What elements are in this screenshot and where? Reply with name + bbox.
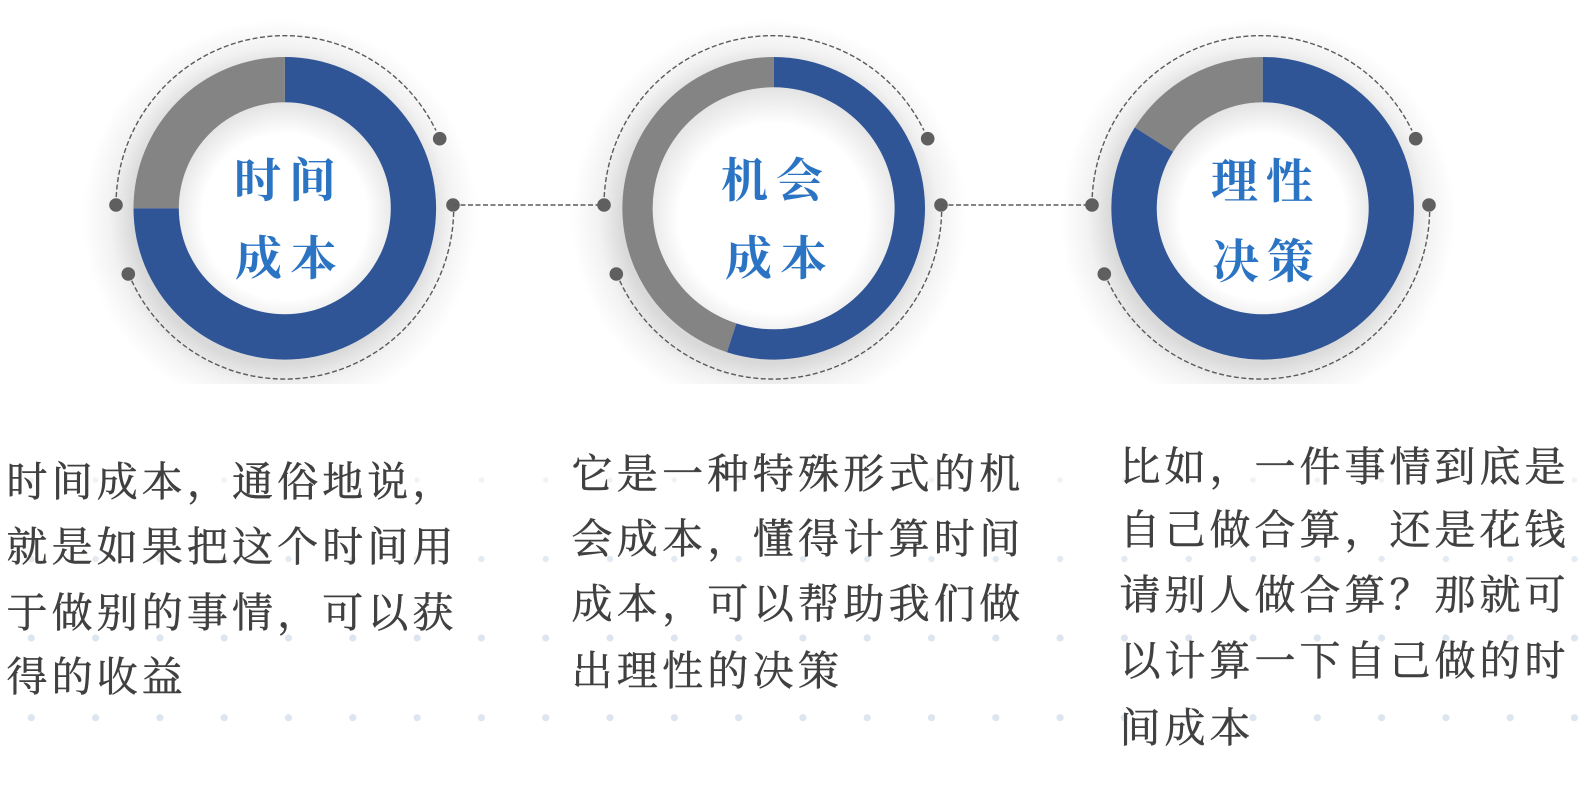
panel: 理性决策 donut <box>1078 38 1437 384</box>
text block: 理性决策 description: 间成本 <box>1120 705 1254 751</box>
text block: 机会成本 description: 成本，可以帮助我们做 <box>572 581 1024 627</box>
heading: 理性决策 <box>1211 157 1322 289</box>
donut segment: blue <box>1111 57 1414 360</box>
text block: 时间成本 description: 于做别的事情，可以获 <box>6 590 458 636</box>
dashed ring with nodes: first donut <box>109 36 460 379</box>
dashed ring with nodes: second donut <box>597 36 948 379</box>
heading: 时间成本: 时间 <box>234 156 344 208</box>
text block: 理性决策 description: 比如，一件事情到底是 <box>1120 444 1570 490</box>
background dot grid <box>28 477 1578 721</box>
text block: 理性决策 description: 自己做合算，还是花钱 <box>1120 507 1570 553</box>
panel: 机会成本 donut <box>589 38 948 384</box>
text block: 机会成本 description: 会成本，懂得计算时间 <box>572 516 1024 562</box>
donut segment: blue <box>727 57 925 360</box>
text block: 机会成本 description: 它是一种特殊形式的机 <box>572 451 1024 497</box>
dashed ring with nodes: third donut <box>1085 36 1436 379</box>
text block: 时间成本 description: 就是如果把这个时间用 <box>6 524 458 570</box>
donut segment: grey <box>134 57 285 208</box>
heading: 机会成本: 成本 <box>725 234 835 286</box>
heading: 机会成本: 机会 <box>721 156 831 208</box>
text block: 理性决策 description: 请别人做合算？那就可 <box>1120 572 1570 618</box>
arrow: connector from second to third donut <box>941 204 1092 206</box>
donut segment: grey <box>1135 57 1263 152</box>
text block: 机会成本 description: 出理性的决策 <box>572 648 843 694</box>
text block: 机会成本 description <box>572 451 1024 694</box>
heading: 时间成本 <box>234 156 345 286</box>
arrow: connector from first to second donut <box>453 204 604 206</box>
donut segment: blue <box>134 57 436 360</box>
donut segment: grey <box>622 57 774 352</box>
text block: 时间成本 description: 得的收益 <box>6 654 187 700</box>
heading: 理性决策: 理性 <box>1211 157 1321 209</box>
panel: 时间成本 donut <box>100 38 460 384</box>
text block: 理性决策 description: 以计算一下自己做的时 <box>1120 638 1570 684</box>
text block: 时间成本 description: 时间成本，通俗地说， <box>6 459 458 505</box>
text block: 时间成本 description <box>6 459 458 700</box>
text block: 理性决策 description <box>1120 444 1570 751</box>
heading: 理性决策: 决策 <box>1212 237 1322 289</box>
heading: 时间成本: 成本 <box>235 234 345 286</box>
heading: 机会成本 <box>721 156 835 286</box>
